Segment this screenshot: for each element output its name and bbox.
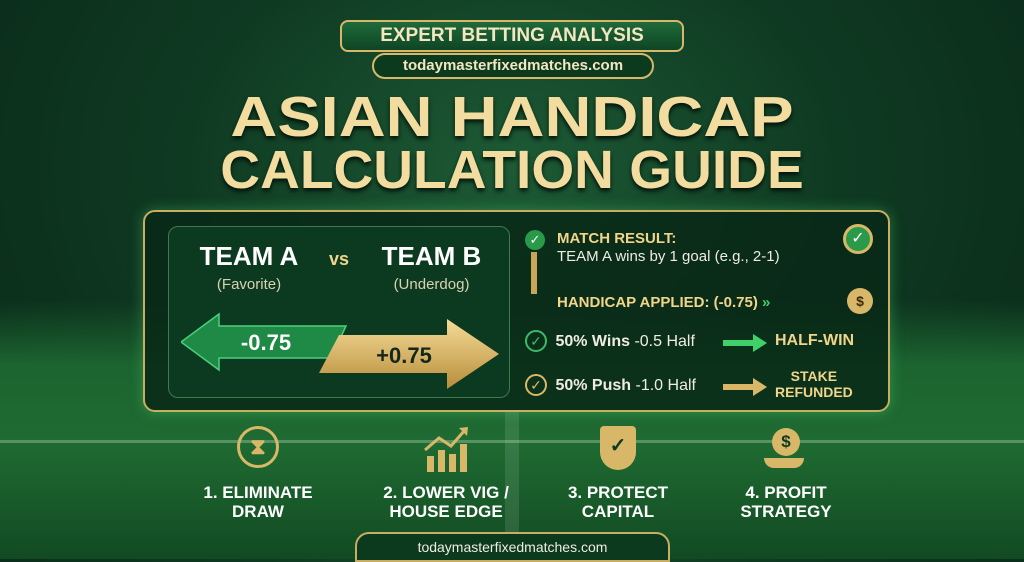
team A label: [200, 241, 298, 293]
benefit: eliminate draw: DRAW: [232, 502, 284, 521]
benefit: protect capital: CAPITAL: [582, 502, 654, 521]
team A label: TEAM A: [200, 241, 298, 271]
half win row: [525, 330, 854, 352]
benefit: profit strategy: 4. PROFIT: [745, 483, 827, 502]
push row: 50% Push -1.0 Half: [555, 377, 696, 394]
panel: calculation steps: [525, 224, 873, 400]
top banner: expert betting analysis: [340, 20, 684, 52]
icon: coins: [847, 288, 873, 314]
push row: ✓: [530, 377, 542, 393]
title: CALCULATION GUIDE: [220, 140, 804, 200]
benefit: profit strategy: $: [781, 432, 791, 451]
panel: team comparison: [168, 226, 510, 398]
footer url: [355, 532, 670, 562]
benefit: eliminate draw: [203, 426, 313, 521]
icon: coins: $: [856, 293, 864, 309]
push row: [525, 368, 853, 400]
push row: REFUNDED: [775, 384, 853, 400]
benefit: profit strategy: STRATEGY: [740, 502, 832, 521]
arrow: -0.75 green: [181, 312, 348, 372]
match result: MATCH RESULT:: [557, 230, 676, 247]
team B label: (Underdog): [394, 276, 469, 293]
arrow: -0.75 green: -0.75: [241, 330, 291, 355]
benefit: protect capital: [568, 426, 668, 521]
arrow: +0.75 gold: [319, 319, 499, 389]
arrow: +0.75 gold: +0.75: [376, 343, 432, 368]
url pill top: todaymasterfixedmatches.com: [403, 57, 623, 74]
title: ASIAN HANDICAP: [230, 85, 794, 149]
vs: vs: [329, 249, 349, 269]
team B label: [382, 241, 481, 293]
match result: [525, 230, 780, 294]
benefit: eliminate draw: 1. ELIMINATE: [203, 483, 313, 502]
benefit: lower vig: 2. LOWER VIG /: [383, 483, 509, 502]
benefit: protect capital: 3. PROTECT: [568, 483, 668, 502]
half win row: HALF-WIN: [775, 332, 854, 349]
benefit: lower vig: [383, 427, 509, 521]
team A label: (Favorite): [217, 276, 281, 293]
match result: ✓: [530, 232, 540, 247]
url pill top: [372, 53, 654, 79]
match result: TEAM A wins by 1 goal (e.g., 2-1): [557, 248, 780, 265]
icon: award badge: [843, 224, 873, 254]
handicap applied: HANDICAP APPLIED: (-0.75) »: [557, 294, 770, 311]
title: [220, 85, 804, 200]
half win row: ✓: [530, 333, 542, 349]
benefit: protect capital: ✓: [610, 435, 626, 457]
team B label: TEAM B: [382, 241, 481, 271]
push row: STAKE: [791, 368, 837, 384]
benefit: eliminate draw: ⧗: [250, 434, 266, 459]
icon: award badge: ✓: [851, 230, 865, 247]
main panel: [143, 210, 890, 412]
footer url: todaymasterfixedmatches.com: [418, 539, 607, 555]
benefit: lower vig: HOUSE EDGE: [389, 502, 503, 521]
half win row: 50% Wins -0.5 Half: [555, 333, 695, 350]
benefit: profit strategy: [740, 428, 832, 521]
top banner: expert betting analysis: EXPERT BETTING ANALYSIS: [380, 25, 644, 46]
